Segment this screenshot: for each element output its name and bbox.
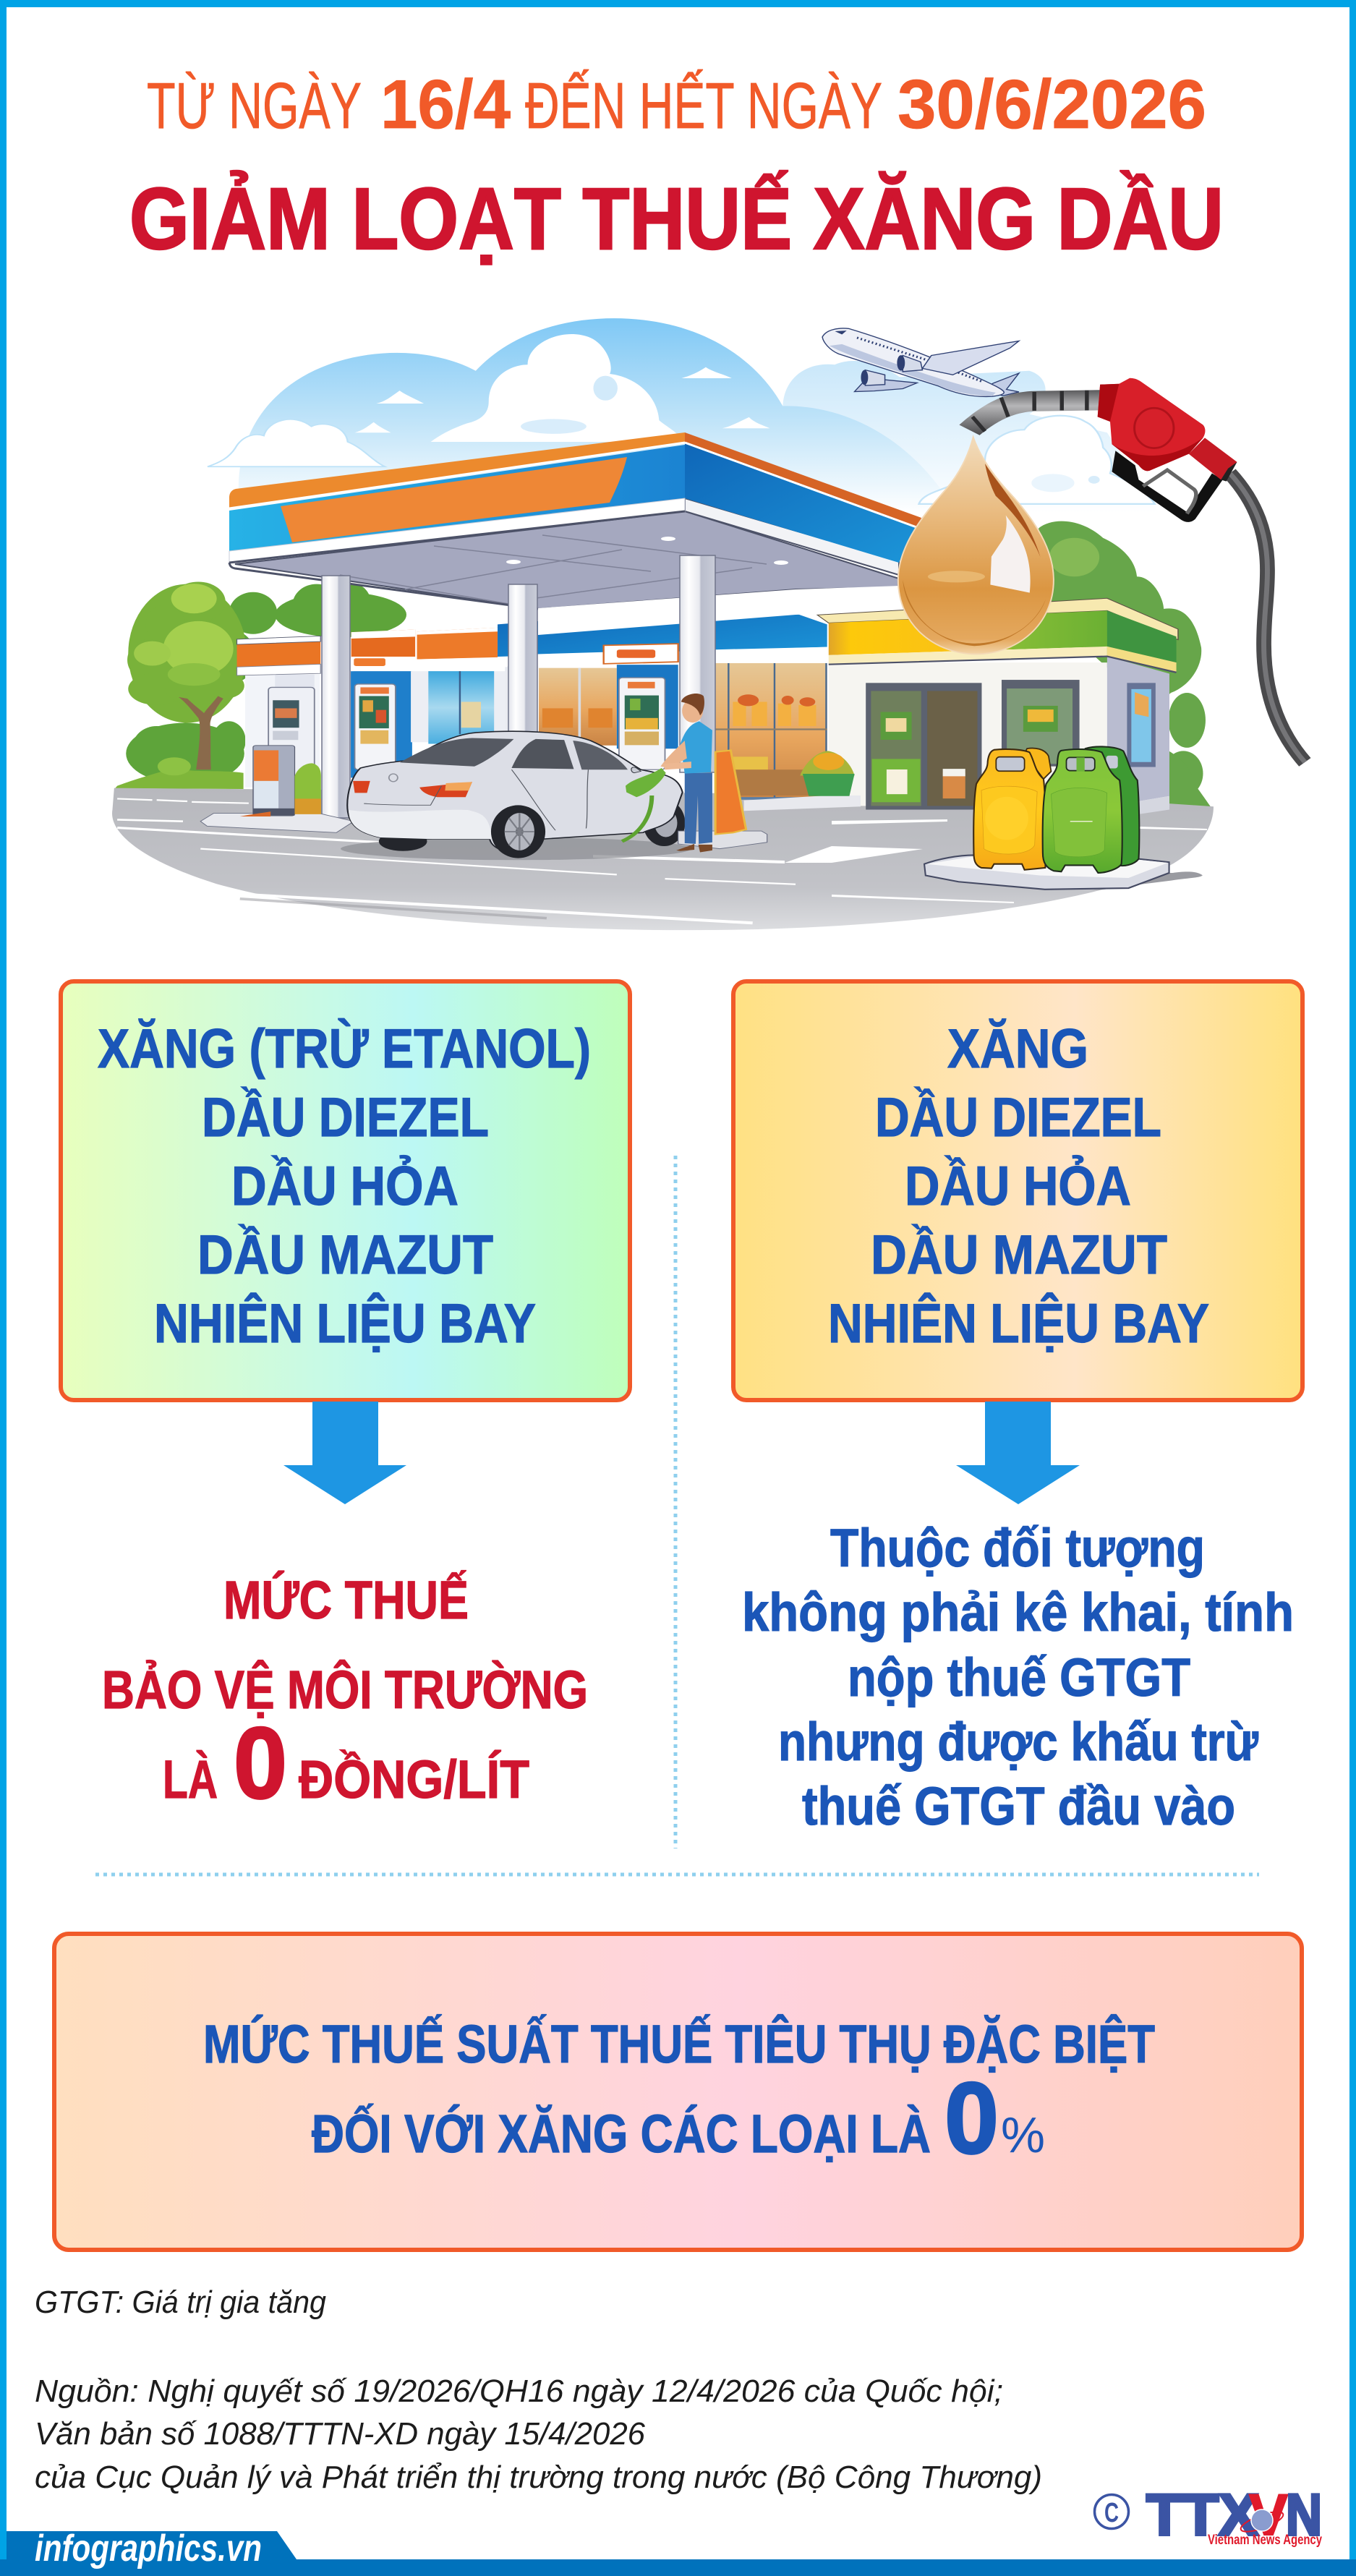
source notes (35, 2374, 1042, 2495)
title (129, 66, 1224, 268)
fuel nozzle and hose (959, 378, 1305, 762)
panel text: 0 (944, 2061, 999, 2175)
subtitle date line: 30/6/2026 (897, 66, 1206, 143)
result: environment protection tax (102, 1570, 588, 1820)
fuel list: XĂNG (947, 1018, 1088, 1080)
box background (54, 1934, 1302, 2250)
back yellow (1025, 748, 1051, 779)
fuel list: DẦU MAZUT (197, 1224, 493, 1286)
shop left wing (237, 607, 827, 800)
green (1043, 749, 1122, 873)
box background (61, 981, 630, 1400)
canopy roof (229, 432, 921, 635)
fuel list: DẦU HỎA (905, 1156, 1131, 1217)
arrow: right (956, 1402, 1080, 1504)
panel: special consumption tax (54, 1934, 1302, 2250)
fuel list: NHIÊN LIỆU BAY (154, 1292, 536, 1355)
panel: fuels exempt from environment tax (61, 981, 630, 1400)
result: environment protection tax: 0 (234, 1706, 287, 1820)
result: VAT text: nộp thuế GTGT (848, 1647, 1190, 1707)
fuel list: DẦU DIEZEL (202, 1087, 489, 1148)
oil drop (898, 437, 1054, 654)
box background (733, 981, 1302, 1400)
fuel list: DẦU HỎA (231, 1156, 459, 1217)
result: VAT text: không phải kê khai, tính (742, 1582, 1294, 1642)
logo: TTXVN: TTX (1146, 2483, 1258, 2548)
subtitle date line: ĐẾN HẾT NGÀY (525, 69, 882, 142)
logo: TTXVN: V (1249, 2483, 1288, 2548)
arrow: left (283, 1402, 406, 1504)
trees (115, 581, 406, 789)
fascia (237, 636, 320, 668)
result: environment protection tax: LÀ (163, 1749, 218, 1809)
subtitle date line: 16/4 (380, 66, 511, 143)
panel text: MỨC THUẾ SUẤT THUẾ TIÊU THỤ ĐẶC BIỆT (203, 2014, 1155, 2074)
car (341, 731, 691, 860)
building base (744, 796, 861, 811)
main heading: GIẢM LOẠT THUẾ XĂNG DẦU (129, 169, 1224, 268)
right store (744, 598, 1178, 819)
site name: infographics.vn (35, 2528, 262, 2569)
logo: TTXVN: C (1104, 2498, 1119, 2528)
result: VAT text: nhưng được khấu trừ (778, 1712, 1258, 1772)
fuel list: DẦU DIEZEL (875, 1087, 1161, 1148)
illustration: petrol station (112, 318, 1305, 930)
result: environment protection tax: MỨC THUẾ (223, 1570, 469, 1630)
fuel list: NHIÊN LIỆU BAY (828, 1292, 1209, 1355)
back green (1086, 746, 1139, 866)
fuel list: DẦU MAZUT (871, 1224, 1167, 1286)
subtitle date line: TỪ NGÀY (147, 70, 362, 142)
result: VAT text: thuế GTGT đầu vào (802, 1776, 1235, 1836)
result: environment protection tax: ĐỒNG/LÍT (299, 1749, 529, 1809)
yellow (973, 749, 1046, 870)
panel text: % (1001, 2107, 1045, 2163)
fuel list (98, 1018, 591, 1355)
note: abbreviation: GTGT: Giá trị gia tăng (35, 2285, 326, 2320)
fuel canisters and island (924, 746, 1203, 891)
logo: TTXVN: N (1286, 2483, 1322, 2548)
footer band (0, 2528, 1356, 2576)
airplane (822, 328, 1019, 396)
panel text (203, 2014, 1155, 2175)
source notes: Văn bản số 1088/TTTN-XD ngày 15/4/2026 (35, 2416, 646, 2452)
small pump and canisters (200, 746, 354, 832)
result: VAT text (742, 1518, 1294, 1836)
logo: TTXVN (1095, 2483, 1322, 2548)
fuel list: XĂNG (TRỪ ETANOL) (98, 1018, 591, 1080)
logo: TTXVN: Vietnam News Agency (1208, 2533, 1322, 2548)
forecourt ground (112, 788, 1214, 930)
sky and clouds (208, 318, 1159, 513)
result: environment protection tax: BẢO VỆ MÔI TRƯỜNG (102, 1660, 588, 1720)
fuel list (828, 1018, 1209, 1355)
panel: fuels with VAT treatment (733, 981, 1302, 1400)
pillars (322, 555, 715, 818)
subtitle date line (147, 66, 1206, 143)
result: VAT text: Thuộc đối tượng (830, 1518, 1205, 1578)
panel text: ĐỐI VỚI XĂNG CÁC LOẠI LÀ (312, 2104, 931, 2164)
attendant (622, 694, 767, 853)
source notes: Nguồn: Nghị quyết số 19/2026/QH16 ngày 12/4/2026 của Quốc hội; (35, 2374, 1003, 2409)
pumps (268, 687, 315, 776)
source notes: của Cục Quản lý và Phát triển thị trường trong nước (Bộ Công Thương) (35, 2460, 1042, 2495)
